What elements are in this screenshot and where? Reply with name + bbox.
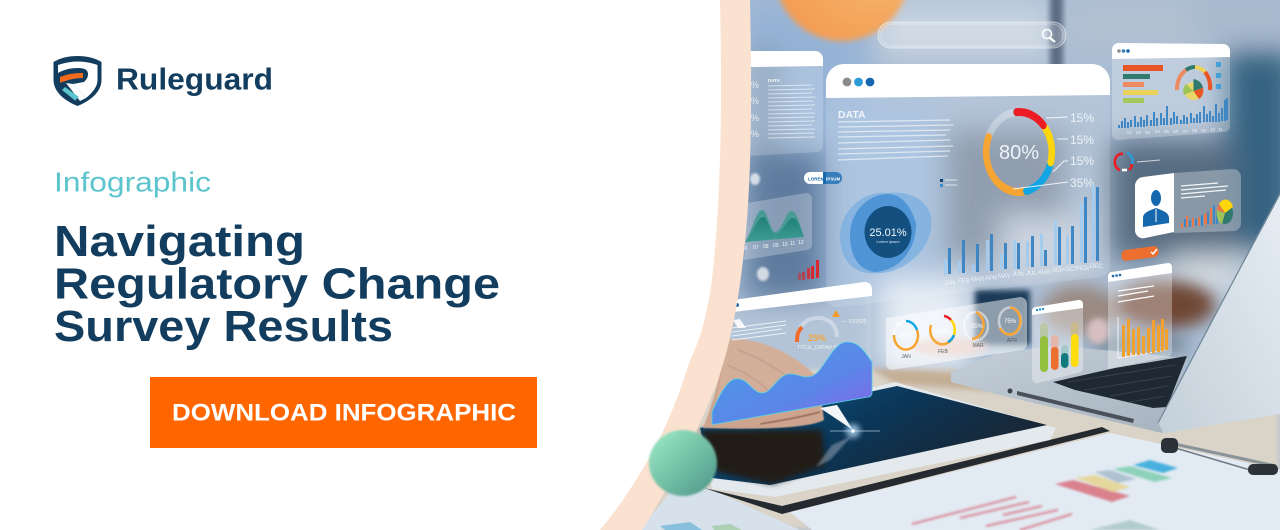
horizontal colour bars (1123, 65, 1163, 103)
axis labels: 10 (782, 242, 788, 248)
blurred paper chart behind card (912, 338, 988, 356)
pen on desk (1170, 443, 1276, 466)
window dots (843, 78, 874, 86)
donut callouts (1013, 117, 1068, 189)
month labels (901, 338, 1018, 360)
toggle button (804, 172, 842, 184)
panel: colour pill bars card (1032, 300, 1083, 383)
heading: data: DATA (838, 109, 866, 121)
axis labels: 07 (753, 245, 759, 251)
hands above keyboard (1042, 281, 1215, 357)
axis labels: 09 (773, 243, 779, 249)
tablet hand reflection (700, 430, 825, 484)
axis labels: 07 (1183, 129, 1189, 134)
monthly bar chart (944, 185, 1103, 287)
icon: person in suit (1143, 190, 1169, 227)
small blue labels (1216, 62, 1221, 89)
tablet (700, 382, 1056, 497)
laptop slot (1017, 391, 1134, 423)
laptop lid (1158, 195, 1280, 433)
percent labels: 35% (1070, 176, 1094, 190)
axis labels: 10 (1210, 127, 1216, 132)
percent labels (751, 80, 759, 139)
window dots (1117, 49, 1130, 53)
heading: survey title (54, 217, 500, 351)
blurred finger (1087, 318, 1109, 344)
month labels: JAN (944, 281, 955, 287)
stylus glow (830, 424, 880, 438)
donut values (900, 319, 1017, 339)
percent labels: % (751, 129, 759, 139)
donut JAN (894, 321, 918, 350)
percent labels: 15% (1070, 111, 1094, 125)
month labels: SEP (1052, 268, 1064, 274)
axis labels: 08 (1192, 128, 1198, 133)
paragraph lines (838, 120, 953, 160)
laptop keyboard (1053, 356, 1187, 408)
decorative glow dots (750, 173, 769, 281)
orange bars (1122, 319, 1168, 357)
donut blob 25.01% (840, 193, 932, 273)
axis (1118, 317, 1166, 358)
clipboard and paper (640, 427, 1280, 530)
month labels: MAR (972, 343, 984, 349)
panel: main data dashboard (826, 64, 1110, 307)
mountain area (745, 210, 804, 242)
legend (940, 179, 957, 187)
hand holding stylus (703, 339, 827, 429)
axis labels: 02 (1136, 130, 1142, 135)
download button (150, 377, 537, 448)
month labels: MAR (971, 277, 985, 283)
text lines (1181, 183, 1228, 198)
axis labels: 05 (1164, 129, 1170, 134)
wordmark: Ruleguard (116, 62, 273, 96)
mini red bar chart (798, 260, 819, 280)
dark navy blur behind chart cards (975, 290, 1030, 345)
percent labels: % (751, 80, 759, 90)
donut blob 25.01%: Lorem ipsum (876, 239, 900, 244)
decorative curved peach band (600, 0, 751, 530)
percent labels (1070, 111, 1094, 190)
heading: DATA (768, 78, 781, 83)
donut FEB (930, 316, 955, 344)
month labels: JUN (1012, 272, 1024, 278)
axis labels (742, 240, 804, 252)
donut chart 80% (973, 96, 1065, 208)
window dots (1112, 274, 1121, 277)
month labels: OCT (1065, 267, 1078, 273)
label: Infographic: Infographic (54, 166, 211, 198)
orange pill button (1121, 246, 1159, 261)
toggle button: IPSUM (826, 176, 841, 182)
text lines (1118, 286, 1154, 302)
laptop (951, 193, 1280, 433)
month labels: JUL (1026, 271, 1037, 277)
text lines (768, 85, 815, 138)
gauge: — 12/2020 (842, 319, 867, 325)
decorative orange ball (775, 0, 909, 41)
month labels: AUG (1038, 270, 1051, 276)
text lines (732, 321, 786, 340)
logo: Ruleguard (54, 56, 273, 106)
gauge: 25% (808, 333, 826, 343)
heading: survey title: Regulatory Change (54, 260, 500, 308)
donut values: 60% (900, 333, 913, 339)
search bar (878, 22, 1066, 48)
donut values: 75% (1004, 319, 1017, 325)
month labels: DEC (1090, 264, 1103, 270)
bar chart (1181, 205, 1218, 228)
donut MAR (964, 312, 988, 340)
axis labels: 04 (1155, 129, 1161, 134)
axis labels (1127, 127, 1223, 135)
donut blob 25.01%: 25.01% (869, 227, 907, 239)
blue bar series (1118, 98, 1228, 128)
axis labels: 01 (1127, 130, 1133, 135)
laptop port (1008, 388, 1012, 394)
paper bar chart (912, 460, 1178, 530)
axis labels: 06 (1173, 129, 1179, 134)
stylus (733, 319, 853, 430)
month labels: NOV (1077, 266, 1090, 272)
panel: orange bars card (1108, 263, 1172, 369)
panel: bottom-left glass chart card (712, 282, 872, 424)
blue area chart (712, 342, 872, 424)
month labels: APR (985, 276, 998, 282)
gauge: TITLE_DATA# 01 (797, 345, 840, 351)
toggle button: LOREM (808, 176, 825, 182)
panel: top right analytics card (1112, 43, 1230, 140)
icon: magnifier (1042, 30, 1055, 42)
panel: left data card (750, 51, 823, 156)
axis labels: 11 (1218, 127, 1223, 132)
donut values: 35% (971, 324, 984, 330)
axis labels: 08 (763, 244, 769, 250)
gauge (797, 310, 867, 351)
percent labels: % (751, 113, 759, 123)
month labels: FEB (958, 279, 970, 285)
icon: check (1151, 249, 1157, 254)
mini donut status (1115, 153, 1160, 170)
pie chart (1217, 200, 1233, 224)
decorative green ball (649, 430, 717, 496)
window dots (1036, 308, 1044, 311)
donut values: 80% (936, 329, 949, 335)
month labels (944, 264, 1103, 287)
donut APR (999, 308, 1021, 334)
axis labels: 06 (742, 246, 748, 252)
panel: monthly donuts card (886, 297, 1027, 370)
panel: person profile card (1135, 169, 1241, 238)
percent labels: 15% (1070, 154, 1094, 168)
heading: survey title: Survey Results (54, 302, 393, 351)
dark vertical pillar (1050, 0, 1063, 80)
heading: survey title: Navigating (54, 217, 305, 266)
photo: office desk background (600, 0, 1280, 530)
month labels: JAN (901, 354, 911, 360)
panel: teal mountain chart (742, 193, 812, 260)
gauge and pie (1177, 67, 1210, 100)
white text panel (0, 0, 721, 530)
month labels: FEB (938, 349, 949, 355)
icon: shield (54, 56, 102, 106)
month labels: APR (1007, 338, 1018, 344)
axis labels: 09 (1201, 128, 1207, 133)
percent labels: % (751, 96, 759, 106)
pill bars (1040, 322, 1078, 372)
table surface (640, 368, 1280, 530)
axis labels: 12 (798, 240, 804, 246)
percent labels: 15% (1070, 133, 1094, 147)
download button: DOWNLOAD INFOGRAPHIC (172, 400, 516, 426)
month labels: MAY (998, 274, 1011, 280)
axis labels: 11 (790, 241, 795, 247)
center value: 80% (999, 142, 1039, 164)
window dot (735, 303, 739, 307)
axis labels: 03 (1145, 130, 1151, 135)
